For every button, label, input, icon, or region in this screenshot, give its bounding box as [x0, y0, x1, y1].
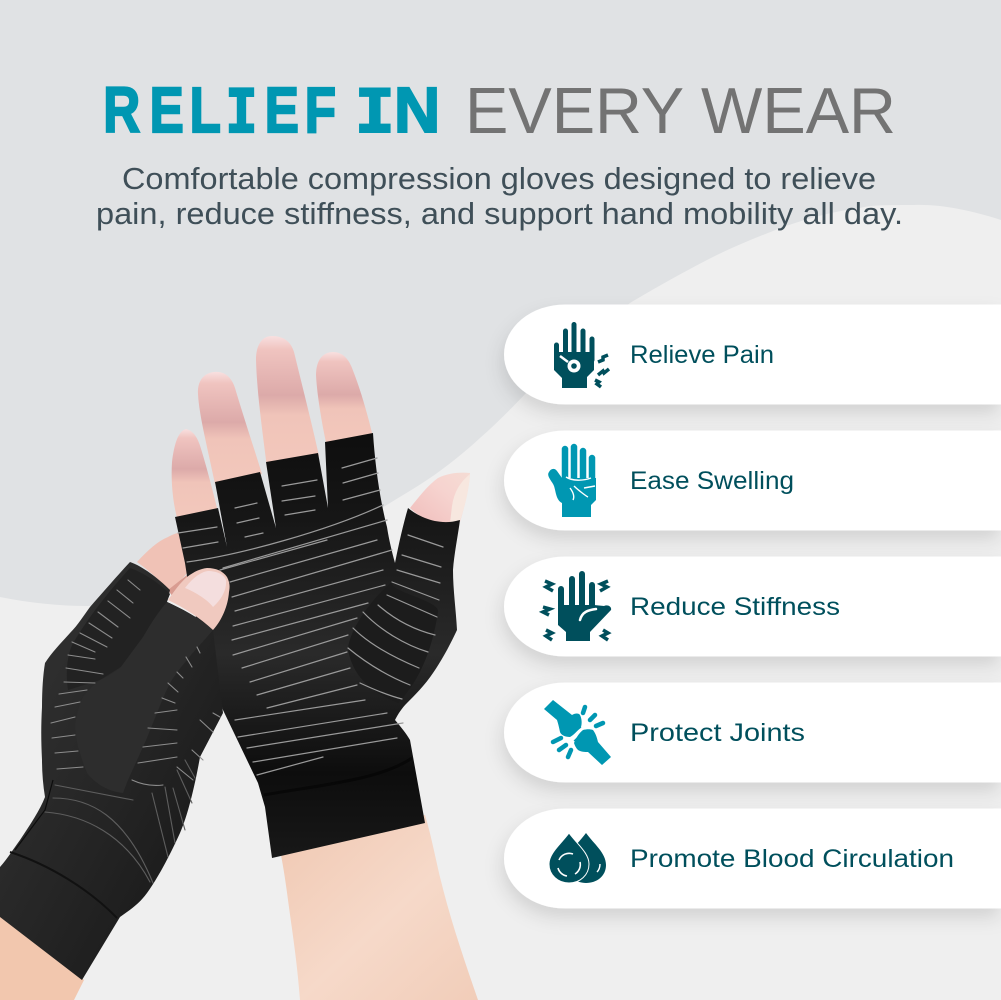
left glove seams — [10, 780, 117, 918]
left glove stripes — [51, 580, 220, 785]
title: E — [150, 76, 184, 146]
label: Promote Blood Circulation — [630, 845, 954, 873]
title: N — [394, 74, 440, 146]
right glove — [175, 433, 460, 858]
icon: hand with pain — [554, 324, 609, 388]
pill: Promote Blood Circulation — [504, 808, 1001, 908]
photo: hands wearing compression gloves — [0, 336, 478, 1000]
subtitle — [96, 161, 903, 231]
subtitle: Comfortable compression gloves designed to relieve — [122, 161, 876, 196]
title: F — [305, 76, 336, 146]
title: I — [226, 77, 257, 152]
title: EVERY WEAR — [465, 74, 896, 147]
pill: Protect Joints — [504, 682, 1001, 782]
pill: Reduce Stiffness — [504, 556, 1001, 656]
label: Reduce Stiffness — [630, 593, 840, 621]
palm stripes — [178, 458, 443, 775]
icon: swollen hand — [548, 447, 596, 517]
left hand fingers behind — [137, 533, 190, 600]
left thumb nail — [185, 571, 226, 607]
label: Relieve Pain — [630, 341, 774, 369]
title: E — [265, 76, 299, 146]
left thumb tip — [168, 568, 230, 630]
thumb nail — [450, 474, 470, 523]
pill: Relieve Pain — [504, 304, 1001, 404]
left forearm — [0, 915, 84, 1000]
icon: stiff hand — [543, 574, 611, 641]
right hand fingers — [172, 336, 373, 518]
right thumb tip — [410, 473, 470, 524]
left thumb pad — [75, 602, 213, 793]
label: Ease Swelling — [630, 467, 794, 495]
title: I — [355, 77, 395, 152]
title: R — [103, 76, 140, 146]
left glove — [0, 562, 223, 980]
left glove fold area — [67, 568, 170, 690]
right thumb mound — [348, 582, 438, 703]
icon: joint — [544, 700, 611, 765]
title: L — [190, 76, 221, 146]
label: Protect Joints — [630, 719, 805, 747]
right glove wrinkle — [264, 758, 412, 795]
right forearm — [280, 815, 478, 1000]
left glove wrist stripes — [45, 760, 195, 883]
pill: Ease Swelling — [504, 430, 1001, 530]
icon: blood drops — [549, 833, 606, 883]
title — [103, 74, 896, 152]
subtitle: pain, reduce stiffness, and support hand mobility all day. — [96, 196, 903, 231]
